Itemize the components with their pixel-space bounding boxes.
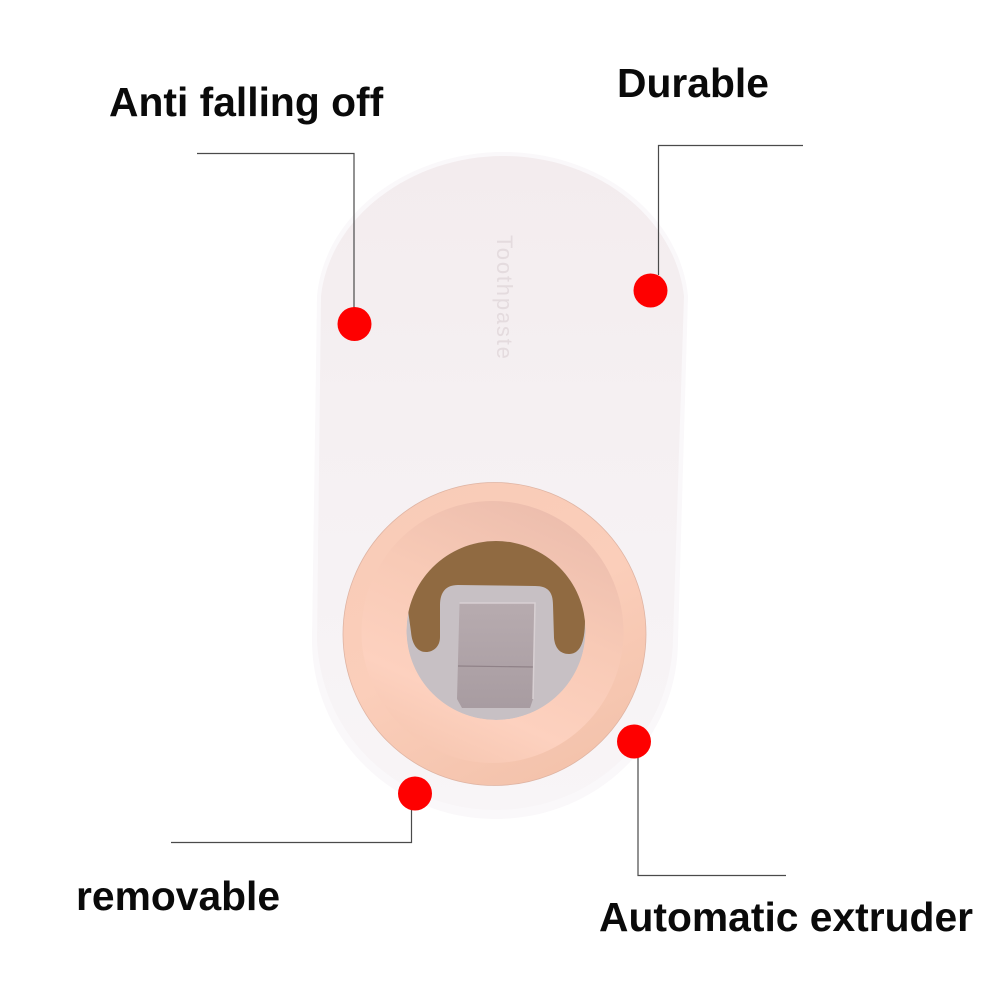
peach ring xyxy=(343,482,646,786)
brown inner surface xyxy=(408,541,585,654)
callout: Durable xyxy=(617,60,803,308)
callout: Automatic extruder: Automatic extruder xyxy=(599,894,973,940)
toothpaste opening xyxy=(406,541,586,720)
callout: removable: removable xyxy=(76,873,280,919)
dispenser body xyxy=(312,152,688,819)
callout: Anti falling off xyxy=(109,79,384,341)
callout: Anti falling off: Anti falling off xyxy=(109,79,384,125)
callout: Automatic extruder xyxy=(599,724,973,940)
inner square recess xyxy=(457,603,535,708)
callout: removable xyxy=(76,776,432,919)
callout: Durable: Durable xyxy=(617,60,769,106)
embossed label: Toothpaste: Toothpaste xyxy=(492,235,517,361)
